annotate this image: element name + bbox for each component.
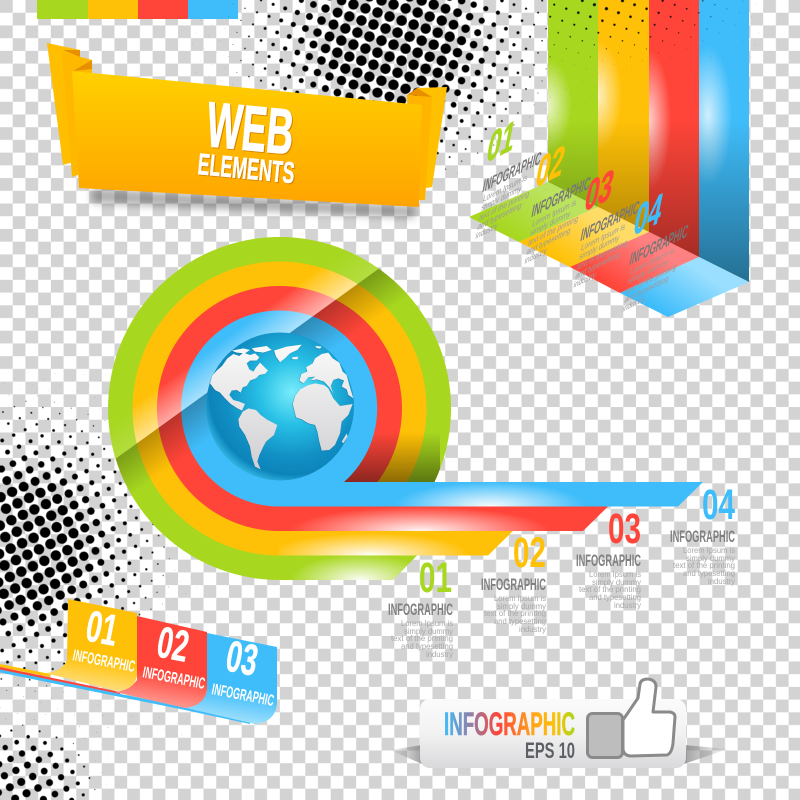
button shadow wings: [390, 745, 728, 764]
wall: yellow: [598, 0, 649, 232]
iso label 01: simply dummy: [480, 183, 522, 214]
iso label 02: [518, 117, 603, 270]
tab 01: INFOGRAPHIC: [71, 647, 137, 676]
iso label 04: INFOGRAPHIC: [628, 222, 690, 270]
flat label 01: text of the printing: [391, 633, 453, 643]
iso label 02: simply dummy: [529, 208, 571, 239]
flat label 02: simply dummy: [497, 601, 547, 611]
banner: web elements: [47, 43, 447, 218]
iso label 04: simply dummy: [627, 256, 669, 287]
ribbon: yellow: [132, 262, 513, 556]
iso label 01: 01: [483, 109, 520, 172]
banner title: ELEMENTS: [196, 148, 296, 190]
flat label 03: text of the printing: [579, 584, 641, 594]
tab 02: 02: [153, 618, 193, 672]
banner title: WEB: [204, 88, 297, 168]
button title: INFOGRAPHIC: [444, 706, 575, 742]
flat label 02: 02: [513, 529, 546, 577]
iso label 04: [616, 165, 701, 318]
isometric colour stripe walls: [548, 0, 749, 282]
iso label 04: Lorem Ipsum is: [629, 245, 675, 278]
colour swatch strip: [37, 0, 238, 19]
flat label 01: 01: [419, 554, 452, 602]
iso label 02: INFOGRAPHIC: [530, 174, 592, 222]
banner main panel: [72, 71, 422, 207]
iso label 03: [567, 141, 652, 294]
iso label 02: text of the printing: [527, 214, 579, 249]
halftone: top: [190, 0, 600, 195]
iso label 03: simply dummy: [578, 232, 620, 263]
banner shadow: [92, 188, 415, 218]
tab 02: INFOGRAPHIC: [141, 664, 207, 693]
wall: green: [548, 0, 598, 207]
flat label 04: INFOGRAPHIC: [670, 527, 735, 546]
ribbon strips: [0, 664, 250, 724]
iso label 02: Lorem Ipsum is: [531, 197, 577, 230]
flat label 01: [388, 554, 454, 659]
ribbon: red: [157, 286, 608, 531]
flat label 04: [670, 481, 736, 586]
button subtitle: EPS 10: [525, 738, 575, 763]
tab 02: [115, 616, 207, 708]
iso label 04: and typesetting: [623, 274, 669, 306]
flat label 01: simply dummy: [404, 626, 454, 636]
banner title: [196, 88, 297, 190]
flat label 04: and typesetting: [683, 568, 735, 578]
flat label 03: and typesetting: [589, 592, 641, 602]
iso label 01: INFOGRAPHIC: [481, 149, 543, 197]
iso label 03: industry: [573, 269, 597, 291]
flat label 01: Lorem Ipsum is: [401, 618, 453, 628]
flat label 01: and typesetting: [401, 641, 453, 651]
flat label 03: simply dummy: [592, 577, 642, 587]
fold shading: [110, 254, 405, 490]
tab 01: [45, 599, 137, 691]
tab 03: INFOGRAPHIC: [210, 681, 276, 710]
icon: thumbs up: [588, 679, 675, 758]
flat label 02: Lorem Ipsum is: [494, 593, 546, 603]
iso label 01: industry: [475, 220, 499, 242]
iso label 03: 03: [581, 158, 618, 221]
iso label 03: INFOGRAPHIC: [579, 198, 641, 246]
flat label 03: Lorem Ipsum is: [589, 569, 641, 579]
curled tabs: [0, 599, 277, 724]
banner left folds: [47, 43, 92, 177]
iso label 02: industry: [524, 245, 548, 267]
flat label 04: simply dummy: [686, 553, 736, 563]
flat label 02: and typesetting: [494, 616, 546, 626]
flat label 02: industry: [519, 624, 547, 634]
iso label 03: Lorem Ipsum is: [580, 221, 626, 254]
flat label 03: 03: [608, 505, 641, 553]
banner right folds: [407, 87, 447, 200]
iso label 01: Lorem Ipsum is: [482, 172, 528, 205]
flat label 02: INFOGRAPHIC: [481, 575, 546, 594]
iso label 02: 02: [532, 134, 569, 197]
iso label 04: 04: [630, 182, 667, 245]
flat label 04: Lorem Ipsum is: [683, 545, 735, 555]
button body: [420, 699, 686, 768]
tab 03: 03: [222, 632, 262, 686]
halftone: left: [0, 370, 200, 740]
iso label 01: and typesetting: [476, 201, 522, 233]
ring and ribbon graphic: [108, 237, 703, 580]
flat label 04: text of the printing: [673, 560, 735, 570]
continents: [210, 345, 353, 469]
isometric floor panels: [469, 182, 749, 317]
halftone: over stripes: [470, 0, 760, 70]
wall: blue: [699, 0, 749, 282]
iso label 01: [469, 92, 554, 245]
ribbon gloss: [279, 483, 580, 580]
halftone: bottom left: [0, 710, 110, 800]
iso label 03: and typesetting: [574, 250, 620, 282]
isometric labels: [469, 92, 701, 318]
iso label 02: and typesetting: [525, 226, 571, 258]
iso label 01: text of the printing: [478, 189, 530, 224]
flat label 04: 04: [702, 481, 735, 529]
icon: globe: [206, 332, 354, 480]
flat label 01: industry: [426, 649, 454, 659]
flat label 04: industry: [708, 576, 736, 586]
ribbon end shading: [344, 436, 440, 482]
flat label 01: INFOGRAPHIC: [388, 600, 453, 619]
tab 03: [182, 632, 277, 724]
flat label 02: [481, 529, 547, 634]
flat label 02: text of the printing: [484, 608, 546, 618]
iso label 04: text of the printing: [625, 262, 677, 297]
infographic button: [390, 679, 728, 768]
flat label 03: [576, 505, 642, 610]
tab 01: 01: [82, 602, 122, 656]
iso label 04: industry: [622, 293, 646, 315]
ribbon: green: [108, 237, 451, 580]
flat label 03: industry: [614, 600, 642, 610]
flat label 03: INFOGRAPHIC: [576, 551, 641, 570]
ribbon: blue: [181, 311, 703, 507]
iso label 03: text of the printing: [576, 238, 628, 273]
wall: red: [649, 0, 699, 257]
